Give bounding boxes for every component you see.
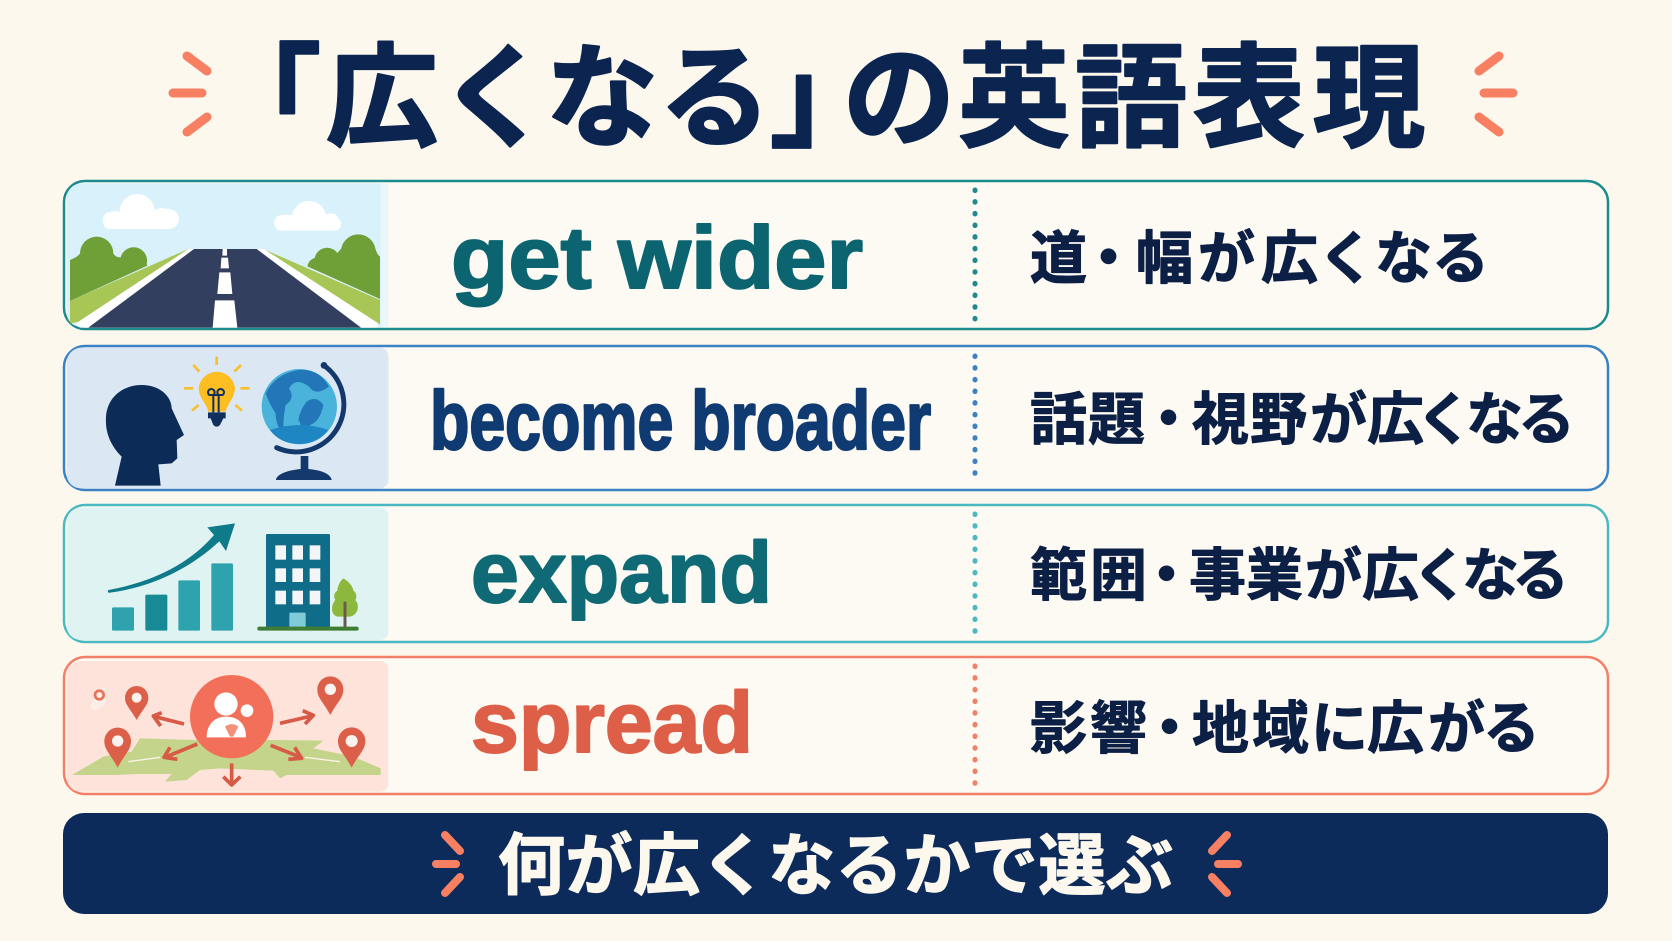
english term: get wider: [451, 208, 863, 307]
illustration: head, bulb, globe: [67, 348, 388, 488]
illustration: growth chart and building: [67, 508, 388, 640]
japanese meaning: 範囲・事業が広くなる: [1030, 544, 1569, 608]
japanese meaning: 道・幅が広くなる: [1030, 227, 1489, 291]
divider: [972, 356, 978, 482]
divider: [972, 514, 978, 636]
japanese meaning: 話題・視野が広くなる: [1030, 388, 1575, 452]
icon: left banner sparks: [436, 835, 460, 893]
panel: expand: [64, 505, 1608, 642]
illustration: spreading pins on a map: [67, 661, 388, 792]
icon: right title sparks: [1479, 56, 1513, 132]
panel: become broader: [64, 346, 1608, 490]
illustration: road: [67, 183, 388, 328]
divider: [972, 190, 978, 320]
title: 「広くなる」の英語表現: [209, 36, 1425, 161]
panel: spread: [64, 657, 1608, 794]
english term: become broader: [430, 374, 931, 467]
english term: expand: [471, 525, 772, 621]
banner text: 何が広くなるかで選ぶ: [498, 829, 1173, 904]
icon: right banner sparks: [1212, 835, 1238, 893]
icon: left title sparks: [173, 56, 207, 132]
english term: spread: [471, 675, 753, 771]
banner: [63, 813, 1608, 914]
divider: [972, 666, 978, 788]
japanese meaning: 影響・地域に広がる: [1030, 697, 1540, 761]
panel: get wider: [64, 181, 1608, 329]
